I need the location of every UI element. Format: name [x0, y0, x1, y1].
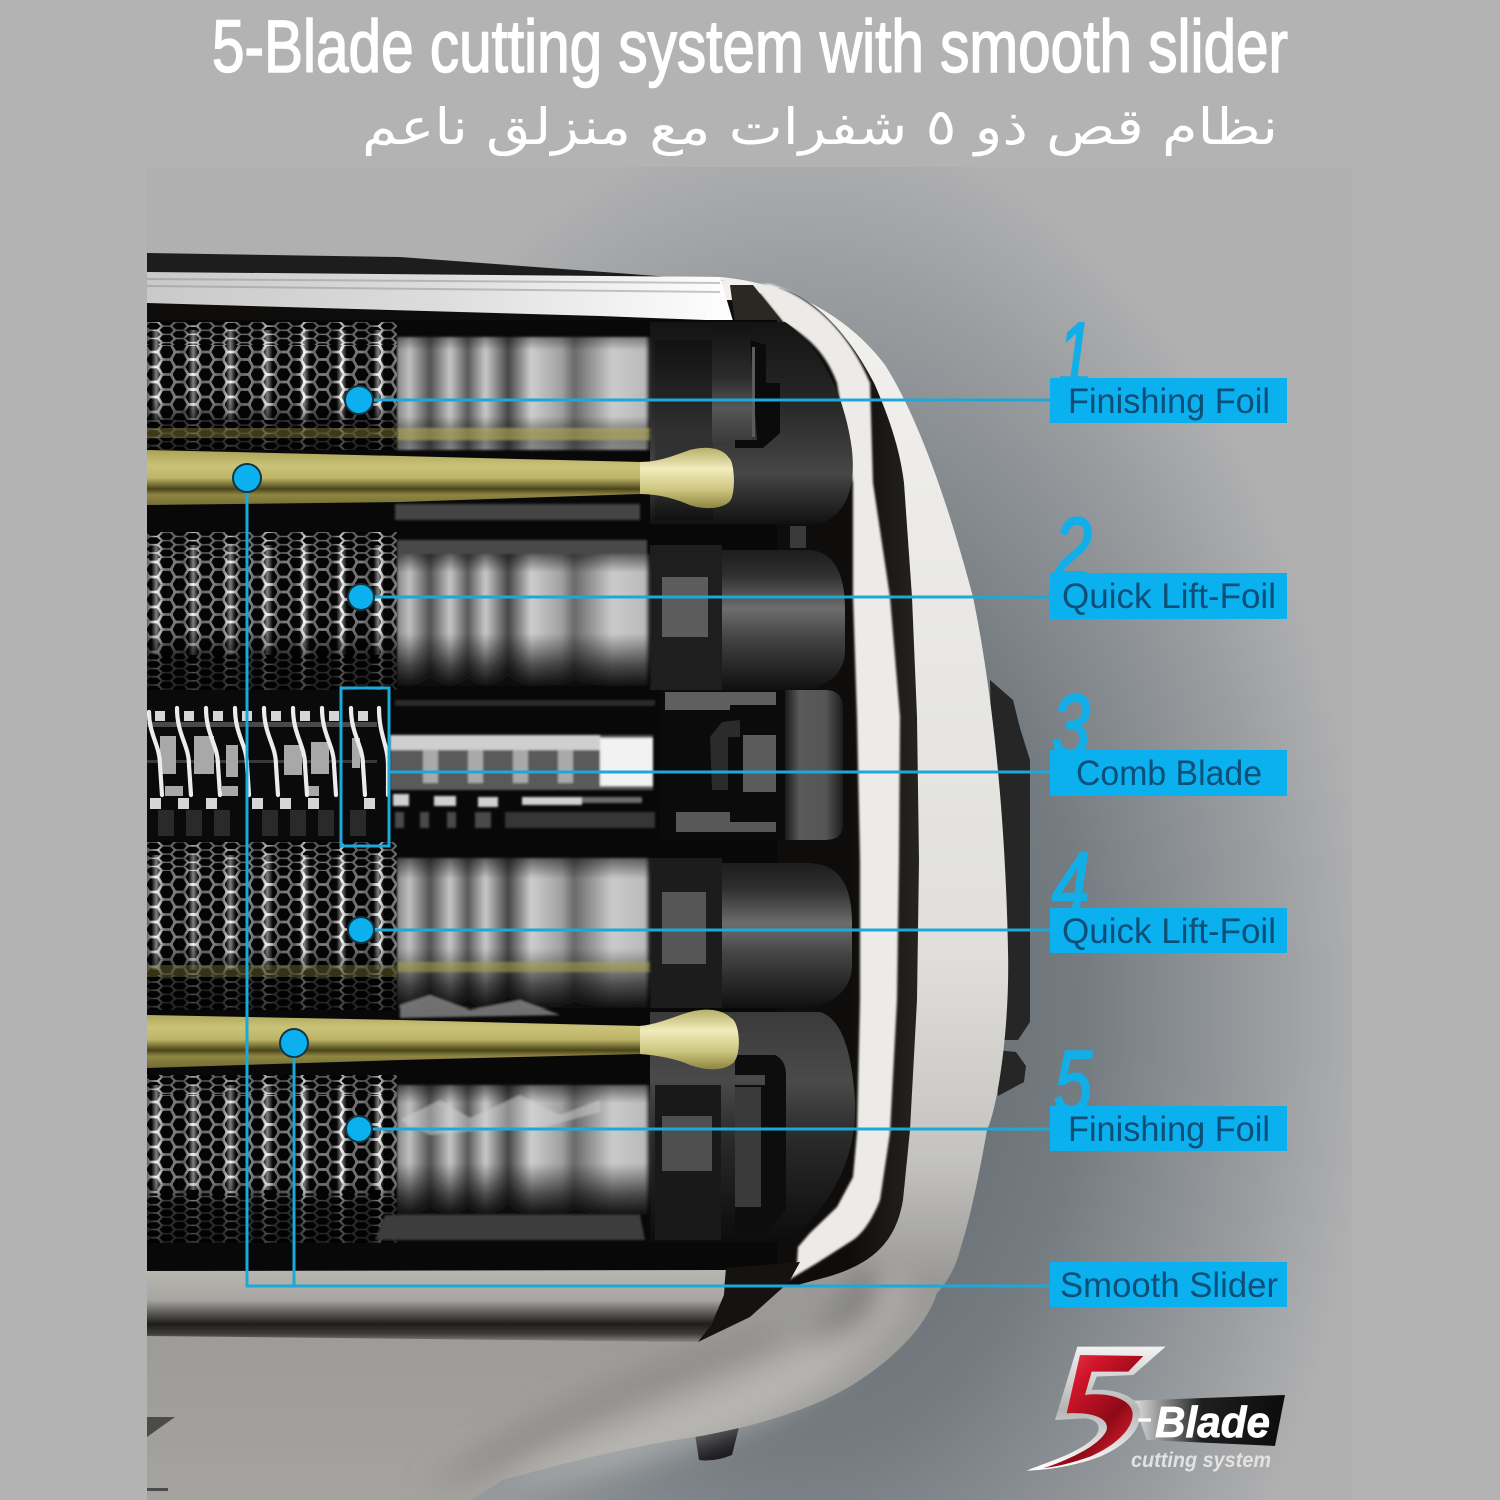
logo: 5-blade cutting system	[1027, 1347, 1285, 1472]
label: comb blade 3: Comb Blade	[1076, 754, 1262, 793]
number labels: 4	[1052, 834, 1090, 933]
shaver outer body	[147, 272, 1008, 1500]
cap row 5	[650, 1012, 855, 1242]
shaver foot	[695, 1427, 739, 1460]
label: quick lift-foil 4: Quick Lift-Foil	[1062, 912, 1276, 951]
cap row 3: comb blade end	[660, 690, 843, 840]
panel: shaver head illustration	[147, 253, 1030, 1500]
callout lines	[247, 400, 1050, 1286]
silver bottom band	[147, 1270, 726, 1342]
body marks	[147, 1417, 175, 1491]
inner white strip	[753, 284, 900, 1281]
black interior base	[147, 320, 777, 1272]
gold slider rod bottom	[147, 1010, 739, 1069]
cap row 2	[650, 526, 845, 690]
number labels: 5	[1054, 1032, 1093, 1131]
foil 4 mesh	[147, 842, 397, 1010]
comb teeth	[150, 711, 375, 809]
silver top band	[147, 272, 733, 321]
top dark strip	[147, 253, 725, 281]
callout dots	[233, 386, 374, 1142]
body shading	[420, 1265, 910, 1490]
barrel row 4	[397, 858, 650, 1018]
number labels: 1	[1058, 304, 1092, 403]
barrel row 2	[397, 540, 650, 686]
foil 1 mesh	[147, 322, 397, 450]
logo numeral 5	[1027, 1347, 1166, 1471]
shaver side buttons	[990, 680, 1030, 1096]
arabic subtitle: نظام قص ذو ٥ شفرات مع منزلق ناعم	[362, 98, 1278, 157]
label: comb blade 3	[1050, 750, 1287, 796]
comb middle section	[390, 700, 655, 828]
label: quick lift-foil 2: Quick Lift-Foil	[1062, 577, 1276, 616]
number labels	[1052, 304, 1093, 1131]
interior dark area and gap	[147, 288, 919, 1287]
foil 5 mesh	[147, 1075, 397, 1243]
barrel row 1	[395, 337, 650, 520]
shaver tick	[464, 1488, 469, 1500]
label: smooth slider: Smooth Slider	[1060, 1266, 1278, 1305]
dark corner piece	[730, 285, 783, 322]
gold slider rod top	[147, 448, 734, 508]
logo banner	[1133, 1395, 1285, 1446]
cap row 4	[650, 858, 852, 1008]
number labels: 2	[1053, 499, 1092, 598]
logo word blade: Blade	[1155, 1398, 1270, 1447]
number labels: 3	[1052, 676, 1090, 775]
dark flap	[698, 1262, 800, 1342]
photo backdrop	[147, 167, 1352, 1500]
comb blade row	[147, 690, 390, 840]
barrel row 5	[375, 1085, 650, 1240]
label: finishing foil 5: Finishing Foil	[1068, 1110, 1270, 1149]
label: finishing foil 1: Finishing Foil	[1068, 382, 1270, 421]
cap row 1	[650, 322, 853, 524]
logo tagline: cutting system	[1131, 1449, 1271, 1472]
foil 2 mesh	[147, 532, 397, 690]
